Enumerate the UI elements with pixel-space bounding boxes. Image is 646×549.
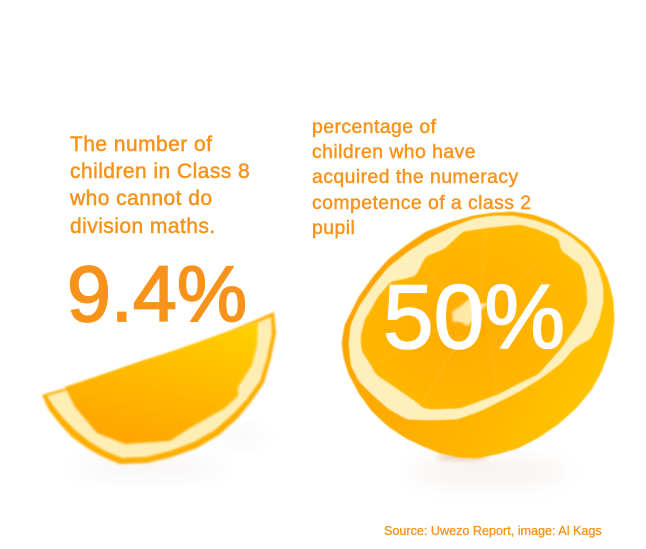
half orange segment lines <box>373 232 540 402</box>
right description text: acquired the numeracy <box>312 166 519 188</box>
right description text: children who have <box>312 141 476 163</box>
half orange <box>342 212 614 485</box>
wedge pith <box>47 317 272 458</box>
right description text: percentage of <box>312 116 436 138</box>
half orange core <box>452 298 488 326</box>
left description text: division maths. <box>70 215 216 238</box>
wedge skin <box>42 312 276 464</box>
wedge shadow <box>75 461 225 475</box>
wedge flesh <box>65 322 258 444</box>
left statistic: 9.4%: 9.4% <box>67 249 247 338</box>
left description text <box>70 133 250 238</box>
right description text <box>312 116 531 239</box>
half orange pith <box>349 216 603 420</box>
source credit: Source: Uwezo Report, image: Al Kags <box>384 524 602 538</box>
right statistic: 50%: 50% <box>383 267 565 368</box>
half orange skin <box>342 212 614 458</box>
right description text: pupil <box>312 217 355 239</box>
left description text: children in Class 8 <box>70 160 250 183</box>
left description text: The number of <box>70 133 212 156</box>
right description text: competence of a class 2 <box>312 192 531 214</box>
left description text: who cannot do <box>70 187 212 210</box>
orange wedge <box>42 312 276 475</box>
half orange shadow <box>412 459 568 485</box>
half orange flesh <box>361 225 587 409</box>
